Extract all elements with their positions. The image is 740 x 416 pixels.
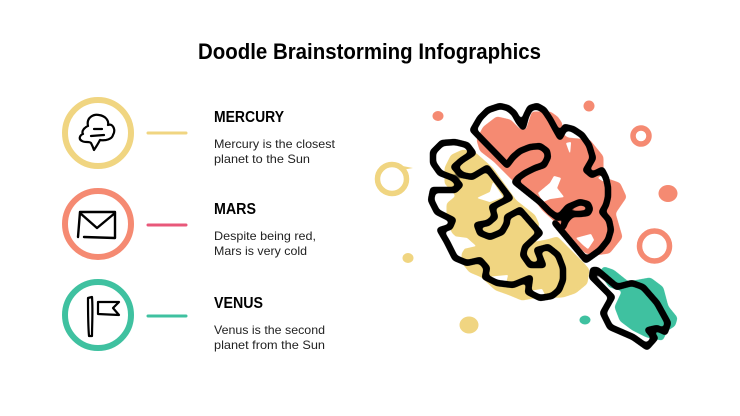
text: Mercury: Mercury is the closest [214, 137, 336, 151]
brain illustration [431, 106, 676, 347]
blob: coral [478, 113, 625, 254]
heading: Mars: MARS [214, 201, 256, 218]
icon: flag [88, 297, 119, 336]
item: Mars: Mars is very cold [214, 244, 307, 258]
decoration: coral dot [432, 111, 444, 121]
item: Mercury: planet to the Sun [214, 152, 310, 166]
outline: upper lobe [473, 106, 611, 260]
decoration: coral blob [658, 185, 678, 202]
decoration: large coral ring [640, 231, 670, 261]
decoration: yellow dot [402, 253, 414, 263]
decoration: large yellow dot [460, 316, 478, 334]
outline: upper lobe inner fold [507, 146, 590, 227]
outline: plug [592, 270, 668, 347]
icon ring: Venus [65, 282, 131, 348]
title: Doodle Brainstorming Infographics [198, 39, 541, 64]
icon: cloud speech bubble [80, 115, 114, 150]
decoration: small coral ring [633, 128, 649, 144]
item: Mercury [65, 100, 336, 166]
blob: green [601, 268, 676, 339]
item: Mars [65, 191, 316, 258]
highlights: yellow blob [452, 182, 546, 298]
decoration: yellow ring [378, 164, 413, 194]
icon ring: Mercury [65, 100, 131, 166]
text: Venus: Venus is the second [214, 323, 325, 337]
connector: Mercury [148, 132, 186, 134]
item: Venus [65, 282, 325, 352]
highlights: coral blob [538, 142, 604, 249]
icon: envelope [78, 212, 115, 238]
outline: lower lobe [431, 142, 563, 298]
heading: Venus: VENUS [214, 295, 263, 312]
connector: Venus [148, 314, 186, 318]
decoration: green dot [580, 316, 590, 324]
item: Venus: planet from the Sun [214, 338, 325, 352]
connector: Mars [148, 224, 186, 226]
decoration: coral top dot [584, 100, 594, 112]
blob: yellow [446, 151, 588, 299]
heading: Mercury: MERCURY [214, 109, 284, 126]
icon ring: Mars [65, 191, 131, 257]
text: Mars: Despite being red, [214, 229, 316, 243]
